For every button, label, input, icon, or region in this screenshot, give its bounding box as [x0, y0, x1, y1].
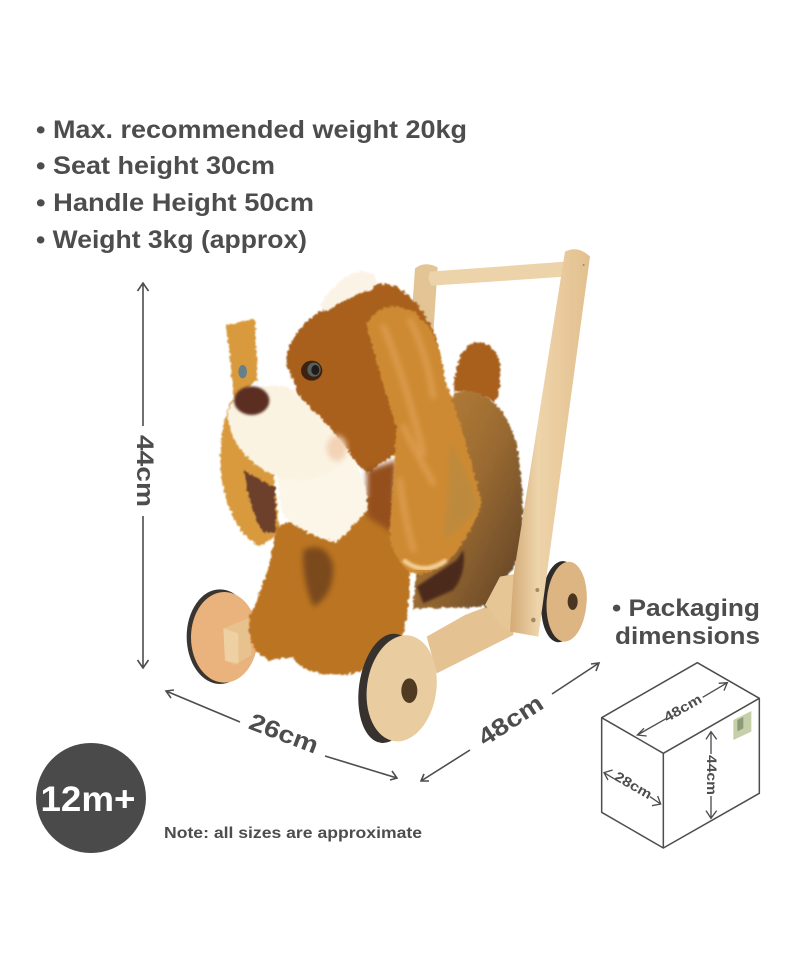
base frame: [427, 603, 513, 673]
base joint: [485, 573, 518, 633]
far eye: [238, 365, 247, 378]
box dimension: 48cm: 48cm: [661, 691, 704, 725]
ear tip: [403, 560, 447, 568]
bullet: handle height: • Handle Height 50cm: [36, 189, 314, 217]
arrows on box: [604, 683, 727, 818]
inner ear: [244, 470, 276, 533]
legs: [249, 493, 410, 675]
packaging label: [612, 595, 760, 650]
bullet: seat height: • Seat height 30cm: [36, 152, 275, 180]
box dimension: 28cm: 28cm: [612, 769, 655, 802]
chest shade: [367, 460, 397, 533]
packaging label: • Packaging: [612, 595, 760, 622]
ear fur strands: [383, 320, 433, 550]
bullet: max weight: • Max. recommended weight 20kg: [36, 116, 467, 144]
box label sticker: [733, 711, 751, 740]
toy: plush dog walker: [187, 249, 590, 747]
front right wheel: [352, 630, 443, 747]
dimension arrow: height 44cm: [131, 283, 158, 668]
chest: [277, 453, 367, 542]
dimension arrow: length 48cm: 48cm: [473, 690, 548, 752]
far ear: [220, 318, 280, 547]
packaging label: dimensions: [615, 623, 760, 650]
muzzle: [228, 385, 348, 480]
muzzle blush: [327, 436, 347, 461]
rear wheel: [539, 560, 589, 644]
upright post: [510, 249, 590, 637]
plush tail: [453, 342, 500, 402]
head: [285, 284, 447, 473]
nose: [234, 386, 269, 415]
handle bar: [412, 262, 565, 333]
dimension arrow: height 44cm: 44cm: [131, 435, 158, 507]
dimension arrow: width 26cm: 26cm: [245, 708, 322, 760]
plush body: [413, 390, 523, 608]
front left wheel: [187, 589, 258, 684]
age badge: 12m+: [40, 780, 136, 819]
belly shadow: [417, 550, 464, 603]
leg shadow: [303, 547, 333, 607]
ear underside: [443, 440, 478, 540]
packaging box diagram: [602, 663, 759, 848]
age badge: [36, 743, 146, 853]
note: Note: all sizes are approximate: [164, 825, 422, 842]
near ear: [367, 306, 482, 574]
dimension arrow: length 48cm: [421, 663, 599, 781]
dimension arrow: width 26cm: [166, 690, 397, 780]
post screws: [531, 264, 585, 622]
bullet: product weight: • Weight 3kg (approx): [36, 226, 307, 254]
top blaze: [320, 271, 376, 312]
eye: [301, 361, 322, 381]
feature list: [36, 116, 467, 254]
box outline: [602, 663, 759, 848]
box dimension: 44cm: 44cm: [704, 755, 719, 795]
